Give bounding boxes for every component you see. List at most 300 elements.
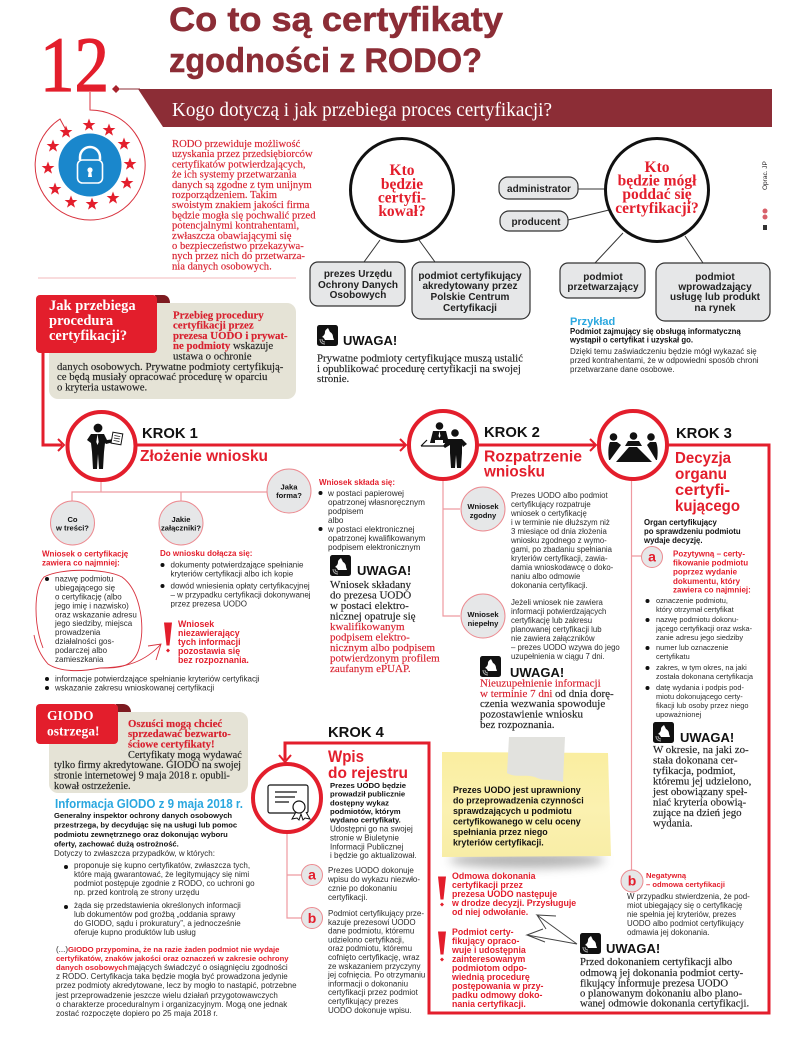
title: zgodności z RODO? bbox=[169, 42, 482, 80]
step 1 heading: KROK 1 bbox=[142, 426, 198, 442]
intro text: nych przez nich do przetwarza- bbox=[172, 251, 305, 262]
callout: before certification: wanej odmowie dokonania certyfikacji. bbox=[580, 998, 749, 1010]
diagram: who can be certified: poddać się bbox=[622, 186, 692, 203]
branch: complete application: 3 miesiące od dnia złożenia bbox=[511, 527, 607, 536]
branch: complete application: damia wnioskodawcę o doko- bbox=[511, 563, 614, 572]
GIODO information: Generalny inspektor ochrony danych osobowych bbox=[54, 811, 232, 820]
callout: electronic application: nicznej opatruje się bbox=[330, 610, 416, 622]
branch: incomplete application: uzupełnienia w ciągu 7 dni. bbox=[511, 652, 605, 661]
example: przed kontrahentami, że w odpowiedni sposób chroni bbox=[570, 356, 759, 365]
step 4 register text: stronie w Biuletynie bbox=[330, 834, 399, 842]
author credit bbox=[762, 161, 769, 230]
branch: complete application: naniu albo odmowie bbox=[511, 572, 580, 581]
branch: complete application: kryteriów certyfikacji, zawia- bbox=[511, 554, 608, 563]
GIODO information: certyfikatów, znaków jakości oraz oznaczeń w zakresie ochrony bbox=[56, 954, 289, 963]
callout: electronic application bbox=[330, 555, 442, 675]
panel: GIODO warning: sprzedawać bezwarto- bbox=[128, 728, 231, 740]
example bbox=[569, 316, 761, 374]
step 4 point b bbox=[302, 908, 428, 1015]
example: Przykład bbox=[570, 316, 615, 328]
GIODO information: jest przeprowadzenie jeszcze wielu działań przygotowawczych bbox=[55, 991, 278, 1000]
step 4 register text: Prezes UODO będzie bbox=[330, 781, 407, 790]
callout: private entities: stronie. bbox=[317, 373, 349, 385]
callout: seven days: UWAGA! bbox=[510, 665, 564, 680]
warning: refusal procedure: fikujący opraco- bbox=[452, 936, 520, 946]
step 4 point b: cofnięto certyfikację, wraz bbox=[328, 953, 420, 962]
intro text: certyfikatów potwierdzających, bbox=[172, 159, 306, 170]
branch: incomplete application: Jeżeli wniosek nie zawiera bbox=[511, 598, 604, 607]
branch a: positive decision: jącego certyfikacji oraz wska- bbox=[655, 624, 753, 633]
callout: private entities: UWAGA! bbox=[343, 333, 397, 348]
step 4 point b: certyfikacji przez podmiot bbox=[328, 988, 419, 997]
step 4 register text: podmiotów, którym bbox=[330, 807, 401, 816]
diagram: who will certify bbox=[310, 138, 530, 319]
form of application: w postaci papierowej bbox=[327, 489, 404, 498]
sticky note: sprawdzających u podmiotu bbox=[453, 806, 572, 816]
panel: GIODO warning bbox=[36, 704, 248, 793]
intro text: o bezpieczeństwo przekazywa- bbox=[172, 241, 304, 252]
application content list: jego imię i nazwisko) bbox=[54, 601, 129, 610]
branch: incomplete application: planowanej certyfikacji lub bbox=[511, 625, 602, 634]
branch: complete application: wniosku zgodnego z wymo- bbox=[510, 536, 607, 545]
sticky note: spełniania przez niego bbox=[453, 827, 548, 837]
callout: before certification: Przed dokonaniem certyfikacji albo bbox=[580, 956, 732, 968]
diagram: who can be certified: usługę lub produkt bbox=[670, 292, 761, 303]
callout: period of certification: wydania. bbox=[653, 818, 693, 830]
warning: refusal procedure: postępowania w przy- bbox=[452, 981, 543, 991]
branch b: negative decision bbox=[621, 870, 752, 937]
callout: seven days: czenia wezwania spowoduje bbox=[480, 698, 605, 710]
branch a: positive decision: nazwę podmiotu dokonu- bbox=[656, 615, 739, 624]
step 2 heading: wniosku bbox=[483, 464, 545, 480]
branch a: positive decision: zanie adresu jego siedziby bbox=[656, 633, 743, 642]
branch a: positive decision: datę wydania i podpis pod- bbox=[656, 683, 744, 692]
step 3 circle icon bbox=[599, 411, 667, 479]
warning: incomplete application: pozostawia się bbox=[178, 646, 240, 656]
warning: refusal procedure bbox=[438, 927, 546, 1009]
step 2 heading bbox=[483, 425, 582, 480]
GIODO information: podmiotu zewnętrznego oraz dokonując wyboru bbox=[54, 830, 228, 839]
branch a: positive decision: została dokonana certyfikacja bbox=[656, 672, 754, 681]
branch: complete application: i w terminie nie dłuższym niż bbox=[511, 518, 610, 527]
step 4 point b: Podmiot certyfikujący prze- bbox=[328, 909, 424, 918]
form of application: Wniosek składa się: bbox=[319, 478, 395, 487]
GIODO information: Informacja GIODO z 9 maja 2018 r. bbox=[55, 797, 243, 811]
branch: incomplete application: informacji potwierdzających bbox=[511, 607, 606, 616]
callout: private entities: Prywatne podmioty certyfikujące muszą ustalić bbox=[317, 352, 523, 364]
question circles step 1: forma? bbox=[276, 491, 302, 500]
intro text: zwłaszcza obawiającymi się bbox=[172, 231, 292, 242]
example: przetwarzane dane osobowe. bbox=[570, 365, 675, 374]
example: Podmiot zajmujący się obsługą informatyczną bbox=[570, 327, 741, 336]
diagram: who can be certified: podmiot bbox=[583, 272, 623, 283]
application content list: ubiegającego się bbox=[55, 584, 116, 593]
form of application: w postaci elektronicznej bbox=[327, 525, 415, 534]
GIODO information: o charakterze proceduralnym i organizacyjnym. Mogą one jednak bbox=[56, 1000, 288, 1009]
step 4 point b: dane podmiotu, któremu bbox=[328, 927, 414, 936]
step 4 point b: UODO dokonuje wpisu. bbox=[328, 1006, 412, 1015]
step 2 heading: Rozpatrzenie bbox=[484, 448, 582, 466]
step 4 point b: ze wskazaniem przyczyny bbox=[328, 962, 420, 971]
attachments list: dowód wniesienia opłaty certyfikacyjnej bbox=[170, 582, 310, 590]
branch a: positive decision: numer lub oznaczenie bbox=[656, 643, 728, 652]
branch a: positive decision: fikowanie podmiotu bbox=[673, 559, 748, 568]
form of application: opatrzonej kwalifikowanym bbox=[328, 534, 426, 543]
application content list: prowadzenia bbox=[55, 628, 101, 637]
branch: incomplete application: certyfikację lub zakresu bbox=[511, 616, 592, 625]
warning: incomplete application bbox=[164, 619, 249, 665]
step 3 heading bbox=[675, 426, 740, 515]
branch a: positive decision: zawiera co najmniej: bbox=[673, 586, 751, 595]
attachments list: Do wniosku dołącza się: bbox=[160, 549, 252, 558]
panel: procedure bbox=[36, 295, 296, 399]
branch: complete application: Wniosek bbox=[467, 502, 499, 511]
warning: incomplete application: bez rozpoznania. bbox=[178, 655, 249, 665]
branch a: positive decision: fikacji lub osoby przez niego bbox=[656, 701, 748, 710]
panel: GIODO warning: Certyfikaty mogą wydawać bbox=[128, 750, 242, 761]
callout: seven days: bez rozpoznania. bbox=[480, 719, 555, 731]
author credit: Oprac. JP bbox=[762, 161, 769, 190]
step 3 heading: kującego bbox=[675, 498, 740, 515]
callout: period of certification: niać kryteria obowią- bbox=[653, 796, 747, 808]
icon: padlock with EU stars bbox=[35, 92, 145, 220]
callout: before certification: UWAGA! bbox=[606, 941, 660, 956]
callout: electronic application: kwalifikowanym bbox=[330, 621, 405, 633]
GIODO information: oferuje kupno produktów lub usług bbox=[74, 928, 196, 937]
branch b: negative decision: b bbox=[628, 872, 636, 888]
callout: before certification: o planowanym dokonaniu albo plano- bbox=[580, 988, 743, 1000]
branch b: negative decision: W przypadku stwierdzenia, że pod- bbox=[627, 892, 750, 901]
panel: GIODO warning: ostrzega! bbox=[47, 724, 99, 738]
diagram: who will certify: Polskie Centrum bbox=[431, 292, 510, 303]
GIODO information: GIODO przypomina, że na razie żaden podmiot nie wydaje bbox=[68, 945, 280, 954]
intro text: uzyskania przez przedsiębiorców bbox=[172, 149, 313, 160]
step 4 point a: cznie po dokonaniu bbox=[328, 884, 397, 893]
panel: procedure: ne podmioty bbox=[173, 340, 231, 352]
callout: seven days: w terminie 7 dni bbox=[480, 688, 552, 700]
diagram: who will certify: certyfi- bbox=[378, 190, 426, 206]
warning: refusal procedure: wiednią procedurę bbox=[451, 972, 530, 982]
callout: electronic application: podpisem elektro- bbox=[330, 632, 410, 644]
step 3 decision: po sprawdzeniu podmiotu bbox=[644, 527, 741, 536]
step 4 point a: certyfikacji. bbox=[328, 893, 368, 902]
branch a: positive decision: oznaczenie podmiotu, bbox=[656, 596, 728, 605]
callout: before certification: odmową jej dokonania podmiot certy- bbox=[580, 967, 744, 979]
callout: seven days: pozostawienie wniosku bbox=[480, 708, 583, 720]
diagram: who will certify: Osobowych bbox=[330, 290, 386, 301]
intro text: swoistym znakiem jakości firma bbox=[172, 200, 310, 211]
panel: procedure: Przebieg procedury bbox=[173, 310, 264, 322]
warning: refusal procedure: wuje i udostępnia bbox=[451, 945, 526, 955]
branch a: positive decision: który otrzymał certyfikat bbox=[656, 605, 734, 614]
panel: GIODO warning: stronie internetowej 9 maja 2018 r. opubli- bbox=[54, 770, 230, 782]
subtitle banner bbox=[138, 89, 772, 127]
step 3 decision: wydaje decyzję. bbox=[643, 536, 703, 545]
application content list: Wniosek o certyfikację bbox=[42, 550, 129, 559]
step 4 register text: Udostępni go na swojej bbox=[330, 824, 413, 834]
step 4 point b: b bbox=[308, 910, 316, 926]
step 4 point b: informacji o dokonaniu bbox=[328, 979, 408, 988]
diagram: who can be certified: certyfikacji? bbox=[615, 200, 699, 217]
sticky note: kryteriów certyfikacji. bbox=[453, 838, 544, 848]
callout: electronic application: UWAGA! bbox=[357, 563, 411, 578]
callout: seven days: Nieuzupełnienie informacji bbox=[480, 678, 601, 690]
attachments list: – w przypadku certyfikacji dokonywanej bbox=[170, 590, 311, 600]
callout: seven days bbox=[480, 656, 616, 731]
diagram: who can be certified: Kto bbox=[645, 159, 670, 176]
title bbox=[169, 1, 503, 80]
panel: procedure: ustawa o ochronie bbox=[173, 350, 252, 362]
GIODO information: oferty, zachować dużą ostrożność. bbox=[54, 840, 179, 848]
GIODO information: (...) bbox=[56, 945, 68, 954]
form of application: albo bbox=[328, 516, 344, 525]
warning: refusal: prezesa UODO następuje bbox=[452, 889, 557, 899]
sketch arrows bbox=[527, 915, 577, 944]
diagram: who will certify: Certyfikacji bbox=[443, 303, 497, 314]
sticky note: certyfikowanego w celu oceny bbox=[453, 816, 581, 826]
branch: complete application: dokonania certyfikacji. bbox=[511, 581, 588, 590]
diagram: who can be certified: przetwarzający bbox=[567, 282, 639, 293]
callout: period of certification: stała dokonana cer- bbox=[653, 754, 738, 766]
diagram: who can be certified: będzie mógł bbox=[618, 172, 697, 190]
step 4 heading: do rejestru bbox=[328, 765, 408, 782]
diagram: who can be certified: na rynek bbox=[694, 303, 736, 314]
diagram: who will certify: Ochrony Danych bbox=[318, 280, 398, 291]
sticky note bbox=[442, 737, 611, 868]
subtitle banner: Kogo dotyczą i jak przebiega proces certyfikacji? bbox=[172, 99, 552, 121]
branch: complete application: wniosek o certyfikację bbox=[510, 509, 587, 518]
question circles step 1 bbox=[50, 469, 311, 545]
application content list: zamieszkania bbox=[55, 655, 104, 664]
callout: electronic application: potwierdzonym profilem bbox=[330, 652, 440, 664]
step 4 register text: wydano certyfikaty. bbox=[329, 816, 401, 825]
intro text: będzie mogła się pochwalić przed bbox=[172, 210, 316, 221]
callout: period of certification: tyfikacja, podmiot, bbox=[653, 765, 736, 777]
step 3 decision: Organ certyfikujący bbox=[644, 518, 717, 527]
GIODO information: zostać rozpoczęte dopiero po 25 maja 2018 r. bbox=[56, 1009, 218, 1018]
branch: incomplete application: Wniosek bbox=[467, 610, 499, 619]
application content list: informacje potwierdzające spełnianie kryteriów certyfikacji bbox=[55, 675, 260, 684]
panel: GIODO warning: kował ostrzeżenie. bbox=[54, 781, 131, 792]
GIODO information: przestrzega, by decydując się na usługi lub pomoc bbox=[54, 820, 237, 830]
diagram: who will certify: kował? bbox=[378, 203, 426, 220]
step 2 circle icon bbox=[409, 411, 477, 479]
branch: complete application: Prezes UODO albo podmiot bbox=[511, 491, 608, 500]
branch a: positive decision: zakres, w tym okres, na jaki bbox=[656, 663, 747, 672]
step 4 register text: i będzie go aktualizował. bbox=[330, 851, 417, 860]
step 4 circle icon bbox=[253, 764, 321, 832]
GIODO information: lub dokumentów pod groźbą „oddania sprawy bbox=[74, 910, 235, 919]
branch a: positive decision: poprzez wydanie bbox=[673, 568, 738, 577]
attachments list: przez prezesa UODO bbox=[170, 600, 247, 608]
step 4 heading bbox=[328, 725, 408, 782]
step 1 heading bbox=[140, 426, 268, 465]
application content list: działalności gos- bbox=[55, 637, 114, 646]
GIODO information: żąda się przedstawienia określonych informacji bbox=[74, 901, 241, 910]
GIODO information: np. przed kontrolą ze strony urzędu bbox=[74, 888, 199, 897]
panel: procedure: prezesa UODO i prywat- bbox=[173, 330, 288, 342]
step 4 register text bbox=[329, 781, 417, 860]
callout: period of certification: jest obowiązany speł- bbox=[652, 786, 748, 798]
intro text: że ich systemy przetwarzania bbox=[172, 170, 297, 181]
warning: incomplete application: Wniosek bbox=[178, 619, 214, 629]
branch: complete application: certyfikujący rozpatruje bbox=[511, 500, 591, 509]
attachments list bbox=[160, 549, 313, 608]
diagram: who can be certified: podmiot bbox=[695, 272, 735, 283]
question circles step 1: w treści? bbox=[55, 524, 89, 532]
warning: refusal procedure: zainteresowanym bbox=[452, 954, 526, 964]
callout: period of certification bbox=[652, 722, 754, 830]
application content list: wskazanie zakresu wnioskowanej certyfikacji bbox=[54, 684, 214, 692]
branch: incomplete application: nie zawiera załączników bbox=[511, 634, 595, 643]
panel: GIODO warning: GIODO bbox=[47, 708, 94, 723]
warning: incomplete application: niezawierający bbox=[178, 628, 240, 638]
warning: refusal bbox=[438, 871, 579, 917]
GIODO information: proponuje się kupno certyfikatów, zwłaszcza tych, bbox=[74, 861, 250, 870]
panel: procedure: danych osobowych. Prywatne podmioty certyfikują- bbox=[57, 361, 284, 373]
panel: procedure: wskazuje bbox=[233, 340, 273, 352]
step 4 point a: wpisu do wykazu niezwło- bbox=[327, 875, 420, 884]
application content list bbox=[34, 550, 262, 692]
form of application bbox=[318, 478, 428, 552]
sticky note: Prezes UODO jest uprawniony bbox=[453, 785, 581, 795]
form of application: podpisem bbox=[328, 507, 364, 516]
attachments list: dokumenty potwierdzające spełnianie bbox=[170, 560, 304, 570]
panel: GIODO warning: Oszuści mogą chcieć bbox=[128, 718, 222, 730]
warning: refusal: certyfikacji przez bbox=[452, 880, 524, 890]
panel: procedure: certyfikacji? bbox=[49, 328, 127, 344]
step 4 point b: udzielono certyfikacji, bbox=[328, 935, 404, 944]
branch a: positive decision: dokumentu, który bbox=[673, 577, 741, 586]
panel: procedure: ce będą musiały opracować procedurę w oparciu bbox=[57, 371, 268, 383]
callout: before certification bbox=[580, 933, 749, 1010]
step 4 heading: Wpis bbox=[328, 748, 364, 766]
diagram: who can be certified: administrator bbox=[507, 184, 571, 195]
branch a: positive decision: upoważnionej bbox=[656, 710, 702, 719]
diagram: who will certify: akredytowany przez bbox=[422, 281, 518, 292]
callout: electronic application: Wniosek składany bbox=[330, 579, 411, 591]
branch b: negative decision: Negatywną bbox=[646, 871, 687, 880]
warning: refusal: od niej odwołanie. bbox=[452, 907, 528, 917]
step 1 circle icon bbox=[68, 412, 136, 480]
example: wystąpił o certyfikat i uzyskał go. bbox=[569, 336, 693, 344]
step 4 point b: certyfikujący prezes bbox=[328, 997, 398, 1006]
GIODO information: przez podmioty akredytowane, lecz by mogło to nastąpić, potrzebne bbox=[56, 981, 297, 990]
application content list: o certyfikację (albo bbox=[55, 592, 122, 602]
attachments list: kryteriów certyfikacji albo ich kopie bbox=[170, 570, 294, 578]
callout: before certification: fikujący informuje prezesa UODO bbox=[580, 978, 728, 990]
diagram: who will certify: podmiot certyfikujący bbox=[418, 271, 522, 282]
branch: complete application bbox=[461, 487, 615, 590]
panel: procedure: o kryteria ustawowe. bbox=[57, 382, 147, 394]
warning: refusal procedure: Podmiot certy- bbox=[452, 927, 514, 937]
step 3 heading: certyfi- bbox=[675, 482, 730, 499]
branch a: positive decision: Pozytywną – certy- bbox=[673, 550, 745, 559]
form of application: opatrzonej własnoręcznym bbox=[328, 498, 425, 507]
step 4 point a: Prezes UODO dokonuje bbox=[328, 866, 414, 875]
callout: private entities: i opublikować procedurę certyfikacji na swojej bbox=[317, 363, 521, 375]
step 4 point b: kazuje prezesowi UODO bbox=[328, 918, 416, 927]
application content list: nazwę podmiotu bbox=[55, 575, 113, 584]
panel: procedure: certyfikacji przez bbox=[173, 320, 254, 332]
panel: GIODO warning: tylko firmy akredytowane. GIODO na swojej bbox=[54, 760, 241, 771]
branch: incomplete application: – prezes UODO wzywa do jego bbox=[511, 643, 620, 652]
callout: period of certification: UWAGA! bbox=[680, 730, 734, 745]
callout: private entities bbox=[317, 325, 526, 385]
callout: electronic application: zaufanym ePUAP. bbox=[330, 663, 411, 675]
panel: procedure: procedura bbox=[49, 313, 114, 329]
warning: incomplete application: tych informacji bbox=[178, 637, 241, 647]
GIODO information: mających świadczyć o osiągnięciu zgodności bbox=[128, 963, 288, 972]
diagram: who can be certified: producent bbox=[512, 217, 561, 228]
branch: incomplete application: niepełny bbox=[468, 619, 499, 628]
branch: complete application: gami, po zbadaniu spełniania bbox=[511, 545, 613, 554]
step 4 point a bbox=[302, 864, 422, 902]
callout: electronic application: nicznym albo podpisem bbox=[330, 642, 436, 654]
diagram: who will certify: Kto bbox=[390, 162, 415, 179]
step 3 heading: organu bbox=[675, 466, 727, 483]
warning: refusal procedure: nania certyfikacji. bbox=[452, 999, 526, 1009]
intro text: danych są zgodne z tym unijnym bbox=[172, 180, 313, 191]
panel: procedure: Jak przebiega bbox=[49, 298, 136, 314]
branch b: negative decision: miot ubiegający się o certyfikację bbox=[627, 901, 743, 910]
branch: complete application: zgodny bbox=[470, 511, 497, 520]
branch b: negative decision: nie spełnia jej kryteriów, prezes bbox=[627, 910, 736, 919]
step 3 heading: Decyzja bbox=[675, 450, 731, 467]
step 4 point b: oraz podmiotu, któremu bbox=[328, 944, 412, 953]
application content list: podarczej albo bbox=[55, 646, 108, 655]
branch a: positive decision: a bbox=[648, 548, 656, 564]
step 2 heading: KROK 2 bbox=[484, 425, 540, 441]
intro text: rozporządzeniem. Takim bbox=[172, 190, 278, 201]
application content list: oraz wskazanie adresu bbox=[55, 610, 137, 619]
callout: seven days: od dnia dorę- bbox=[555, 688, 614, 700]
callout: electronic application: w postaci elektro- bbox=[330, 600, 409, 612]
branch a: positive decision: certyfikatu bbox=[656, 652, 690, 661]
callout: period of certification: któremu jej udzielono, bbox=[653, 776, 752, 788]
GIODO information: które mają gwarantować, że legitymujący się nimi bbox=[74, 870, 249, 879]
callout: period of certification: W okresie, na jaki zo- bbox=[653, 744, 749, 756]
GIODO information: danych osobowych bbox=[56, 963, 128, 972]
GIODO information: do GIODO, sądu i prokuratury”, a jednocześnie bbox=[74, 919, 241, 928]
branch b: negative decision: UODO albo podmiot certyfikujący bbox=[627, 919, 744, 928]
branch a: positive decision bbox=[642, 546, 755, 719]
title: Co to są certyfikaty bbox=[169, 1, 503, 39]
diagram: who can be certified: wprowadzający bbox=[677, 282, 752, 293]
GIODO information: z RODO. Certyfikacja taka będzie mogła być prowadzona jedynie bbox=[56, 972, 288, 981]
branch b: negative decision: – odmowa certyfikacji bbox=[646, 880, 725, 889]
warning: refusal: w drodze decyzji. Przysługuje bbox=[451, 898, 576, 908]
warning: refusal: Odmowa dokonania bbox=[452, 871, 536, 881]
question circles step 1: załączniki? bbox=[161, 524, 201, 532]
branch a: positive decision: miotu dokonującego certy- bbox=[656, 692, 743, 701]
callout: period of certification: zujące na dzień jego bbox=[653, 807, 742, 819]
section number: 12 bbox=[40, 21, 109, 108]
step 4 register text: prowadził publicznie bbox=[330, 790, 406, 799]
application content list: jego siedziby, miejsca bbox=[54, 619, 133, 628]
step 4 point b: jej cofnięcia. Po otrzymaniu bbox=[327, 971, 425, 980]
step 1 heading: Złożenie wniosku bbox=[140, 448, 268, 465]
warning: refusal procedure: podmiotom odpo- bbox=[452, 963, 527, 973]
question circles step 1: Jaka bbox=[281, 482, 298, 492]
step 4 point a: a bbox=[308, 866, 316, 882]
step 3 heading: KROK 3 bbox=[676, 426, 732, 442]
sticky note: do przeprowadzenia czynności bbox=[453, 796, 584, 806]
diagram: who will certify: będzie bbox=[381, 176, 423, 193]
step 4 heading: KROK 4 bbox=[328, 725, 385, 741]
intro text: nia danych osobowych. bbox=[172, 261, 272, 272]
branch: incomplete application bbox=[461, 594, 622, 661]
